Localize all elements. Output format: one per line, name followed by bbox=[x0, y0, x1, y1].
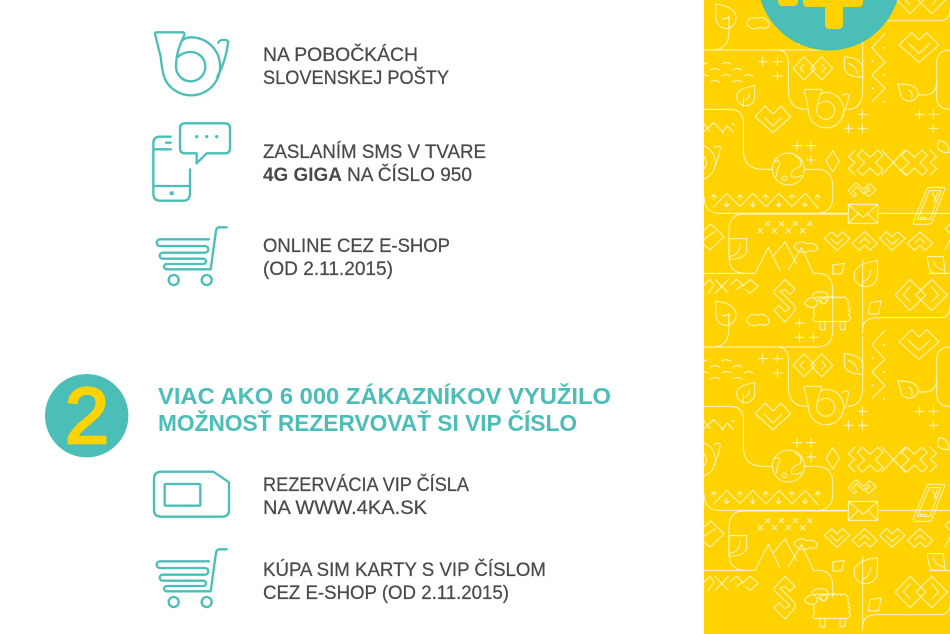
text: at post offices bbox=[263, 43, 449, 89]
text: by SMS bbox=[263, 140, 486, 186]
text: buy SIM: KÚPA SIM KARTY S VIP ČÍSLOM bbox=[263, 558, 546, 581]
text: buy SIM bbox=[263, 558, 546, 604]
icon: shopping cart 2 bbox=[157, 549, 227, 607]
text: at post offices: SLOVENSKEJ POŠTY bbox=[263, 66, 449, 89]
icon: phone with speech bubble bbox=[153, 123, 230, 201]
text: online e-shop: ONLINE CEZ E-SHOP bbox=[263, 235, 450, 257]
text: buy SIM: CEZ E-SHOP (OD 2.11.2015) bbox=[263, 582, 509, 604]
text: by SMS: 4G GIGA bbox=[263, 164, 342, 186]
icon: post horn bbox=[155, 32, 228, 95]
text: VIP reservation: NA WWW.4KA.SK bbox=[263, 497, 427, 519]
number badge 2: 2 bbox=[65, 371, 109, 460]
text: online e-shop: (OD 2.11.2015) bbox=[263, 258, 393, 280]
text: by SMS: ZASLANÍM SMS V TVARE bbox=[263, 140, 486, 163]
panel: yellow pattern sidebar bbox=[704, 0, 950, 634]
icon: SIM card bbox=[154, 472, 229, 517]
heading: VIP numbers: MOŽNOSŤ REZERVOVAŤ SI VIP ČÍSLO bbox=[158, 409, 577, 436]
number badge 2 bbox=[45, 371, 128, 460]
heading: VIP numbers: VIAC AKO 6 000 ZÁKAZNÍKOV VYUŽILO bbox=[158, 382, 611, 409]
text: at post offices: NA POBOČKÁCH bbox=[263, 43, 418, 66]
text: VIP reservation: REZERVÁCIA VIP ČÍSLA bbox=[263, 473, 469, 496]
text: by SMS: NA ČÍSLO 950 bbox=[347, 163, 472, 186]
teal circle with plus bbox=[758, 0, 900, 50]
decorative line pattern bbox=[704, 0, 950, 631]
heading: VIP numbers bbox=[158, 382, 611, 436]
icon: shopping cart bbox=[157, 227, 227, 285]
text: VIP reservation bbox=[263, 473, 469, 519]
text: online e-shop bbox=[263, 235, 450, 280]
